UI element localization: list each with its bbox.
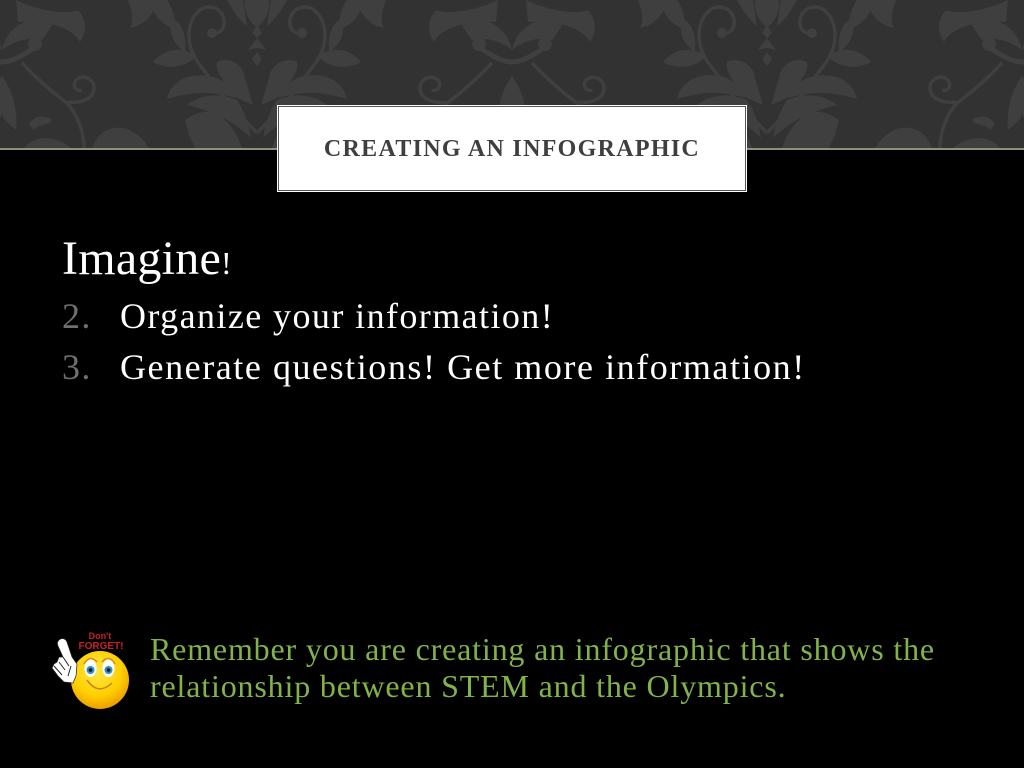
list item 2: 2.	[62, 296, 92, 336]
icon: don't forget smiley	[52, 631, 129, 709]
don't forget text: Don't	[89, 631, 111, 641]
don't forget text	[78, 631, 124, 652]
list item: Imagine: Imagine!	[62, 232, 232, 285]
reminder text	[150, 631, 935, 704]
reminder text: Remember you are creating an infographic that shows the	[150, 631, 935, 667]
list item 2: Organize your information!	[120, 296, 554, 336]
don't forget text: FORGET!	[78, 641, 124, 652]
list item 3: Generate questions! Get more information!	[120, 347, 806, 387]
title box	[277, 105, 747, 192]
header damask band	[0, 0, 1024, 148]
title: CREATING AN INFOGRAPHIC	[324, 136, 700, 162]
reminder text: relationship between STEM and the Olympics.	[150, 668, 786, 704]
header rule line	[0, 148, 1024, 150]
list item 3: 3.	[62, 347, 92, 387]
pointing hand	[52, 639, 77, 683]
face	[71, 651, 129, 709]
